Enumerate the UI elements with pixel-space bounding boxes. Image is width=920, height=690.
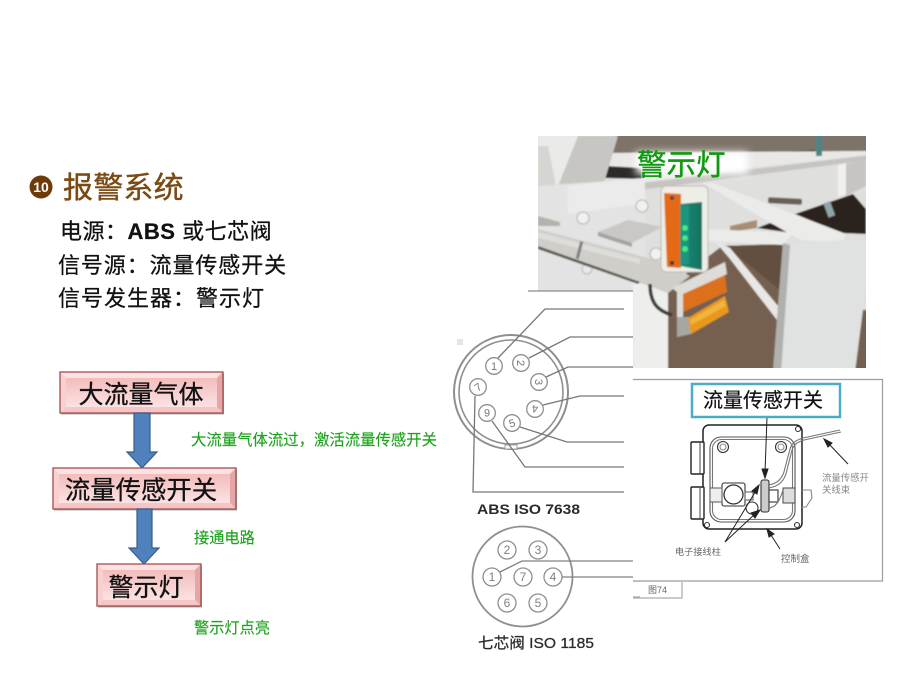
- text block: power, signal source, signal generator: 电源：ABS 或七芯阀: [60, 219, 272, 244]
- note: lamp lights up: 警示灯点亮: [194, 620, 270, 637]
- chart: seven-core valve ISO 1185 connector: 6: [504, 596, 511, 610]
- bracket: [672, 261, 728, 318]
- chart: ABS ISO 7638 connector: 4: [532, 402, 538, 414]
- upper right: dark opening: [795, 194, 866, 234]
- flow box: high-volume gas: [60, 372, 224, 414]
- white struts: [703, 183, 846, 243]
- title: alarm system heading: 报警系统: [63, 172, 184, 205]
- chart: ABS ISO 7638 connector: 7: [473, 381, 485, 394]
- ground: [667, 244, 786, 370]
- flow box: flow sensor switch: [53, 468, 237, 510]
- label: terminal posts: 电子接线柱: [675, 546, 721, 557]
- callout: flow sensor switch: 流量传感开关: [703, 389, 823, 412]
- chart: seven-core valve ISO 1185 connector: 1: [489, 570, 496, 584]
- label: wiring harness: 关线束: [822, 484, 851, 495]
- figure number tab: 图74: [648, 585, 667, 595]
- chart: seven-core valve ISO 1185 connector: 5: [535, 596, 542, 610]
- right white panel: [773, 239, 868, 372]
- arrow: sensor to warning lamp: [129, 509, 159, 564]
- column below pipe: [633, 275, 668, 370]
- caption: ABS ISO 7638: ABS ISO 7638: [477, 501, 580, 517]
- chart: ABS ISO 7638 connector: [454, 291, 633, 492]
- top dark band: [612, 136, 866, 154]
- figure number tab: [633, 582, 682, 598]
- note: gas passes and activates sensor: 大流量气体流过，激活流量传感开关: [191, 432, 437, 449]
- arrow: gas to sensor: [127, 413, 157, 468]
- chart: seven-core valve ISO 1185 connector: 2: [504, 543, 511, 557]
- title: alarm system heading: 10: [33, 179, 49, 195]
- caption: seven-core valve ISO 1185: 七芯阀 ISO 1185: [478, 635, 594, 652]
- panel: connector diagrams white backing: [440, 291, 633, 368]
- photo label: warning lamp: 警示灯: [637, 149, 726, 182]
- wire: [650, 284, 672, 315]
- chart: seven-core valve ISO 1185 connector: [472, 526, 640, 626]
- label: control box: 控制盒: [781, 553, 810, 565]
- chart: ABS ISO 7638 connector: 2: [514, 360, 526, 366]
- text block: power, signal source, signal generator: 信号发生器：警示灯: [58, 286, 265, 311]
- panel: control box diagram: [633, 380, 883, 598]
- chart: ABS ISO 7638 connector: 6: [484, 406, 490, 418]
- chart: seven-core valve ISO 1185 connector: 4: [550, 570, 557, 584]
- chart: seven-core valve ISO 1185 connector: 3: [535, 543, 542, 557]
- white block: [548, 177, 641, 187]
- light gray plate: [598, 220, 662, 243]
- chart: ABS ISO 7638 connector: 3: [532, 379, 544, 385]
- lamp plate: [661, 186, 708, 272]
- label: wiring harness: 流量传感开: [822, 472, 869, 483]
- flow box: high-volume gas: 大流量气体: [78, 381, 204, 409]
- control box drawing: [691, 425, 841, 529]
- note: circuit closes: 接通电路: [194, 530, 255, 547]
- callout: flow sensor switch: [692, 384, 840, 417]
- text block: power, signal source, signal generator: 信号源：流量传感开关: [58, 253, 287, 278]
- chart: ABS ISO 7638 connector: 5: [508, 417, 517, 431]
- flow box: flow sensor switch: 流量传感开关: [65, 477, 217, 505]
- panel: warning lamp photo: [530, 130, 875, 375]
- pipe: [538, 229, 690, 293]
- flow box: warning lamp: [97, 564, 202, 608]
- chart: seven-core valve ISO 1185 connector: 7: [520, 570, 527, 584]
- pale ribbed column: [558, 136, 618, 186]
- label: wiring harness: [822, 472, 869, 495]
- text block: power, signal source, signal generator: [58, 219, 287, 311]
- flow box: warning lamp: 警示灯: [108, 574, 184, 602]
- bolts: [577, 212, 589, 224]
- panel: flow chart: [53, 372, 437, 637]
- lamp LEDs: [682, 225, 688, 252]
- leader arrows: [725, 417, 848, 549]
- chart: ABS ISO 7638 connector: 1: [491, 361, 497, 373]
